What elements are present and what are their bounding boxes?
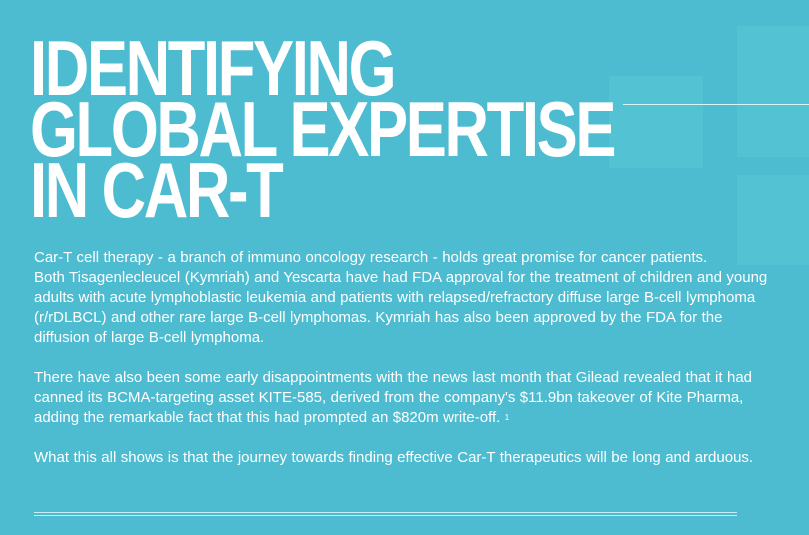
body text: What this all shows is that the journey towards finding effective Car-T therapeutics will be long and arduous. [34,449,753,466]
title [30,24,614,234]
body text: canned its BCMA-targeting asset KITE-585, derived from the company's $11.9bn takeover of Kite Pharma, [34,389,743,406]
body text: (r/rDLBCL) and other rare large B-cell lymphomas. Kymriah has also been approved by the FDA for the [34,309,722,326]
title: IDENTIFYING [30,24,394,112]
body text: adding the remarkable fact that this had prompted an $820m write-off. 1 [34,409,509,426]
body text: There have also been some early disappointments with the news last month that Gilead revealed that it had [34,369,752,386]
body text: diffusion of large B-cell lymphoma. [34,329,264,346]
body text: adults with acute lymphoblastic leukemia and patients with relapsed/refractory diffuse large B-cell lymphoma [34,289,755,306]
title: GLOBAL EXPERTISE [30,85,614,173]
body text: Car-T cell therapy - a branch of immuno oncology research - holds great promise for cancer patients. [34,249,707,266]
divider [34,512,737,516]
title: IN CAR-T [30,146,281,234]
body text [34,249,767,466]
body text: Both Tisagenlecleucel (Kymriah) and Yescarta have had FDA approval for the treatment of children and young [34,269,767,286]
